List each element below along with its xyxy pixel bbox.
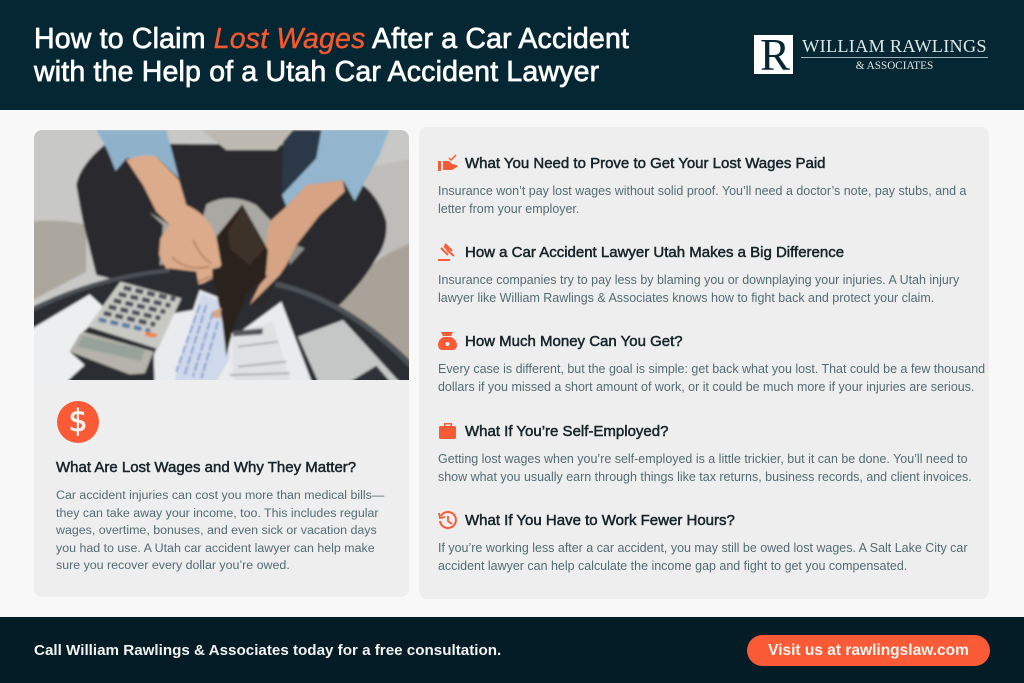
header band bbox=[0, 0, 1024, 110]
body bbox=[438, 452, 972, 484]
logo name: WILLIAM RAWLINGS bbox=[802, 36, 987, 56]
body: dollars if you missed a short amount of work, or it could be much more if your injuries are serious. bbox=[438, 380, 974, 394]
body: letter from your employer. bbox=[438, 202, 579, 216]
button: Visit us at rawlingslaw.com bbox=[768, 642, 969, 659]
heading: How a Car Accident Lawyer Utah Makes a Big Difference bbox=[465, 244, 844, 261]
laptop bbox=[298, 320, 402, 385]
left body text: wages, overtime, bonuses, and even sick or vacation days bbox=[56, 523, 377, 537]
section: fewer hours bbox=[438, 511, 968, 573]
shirt bbox=[282, 130, 323, 195]
section: proof bbox=[438, 154, 966, 216]
heading: What You Need to Prove to Get Your Lost Wages Paid bbox=[465, 155, 826, 172]
body: Insurance companies try to pay less by blaming you or downplaying your injuries. A Utah injury bbox=[438, 273, 959, 287]
body: Insurance won’t pay lost wages without solid proof. You’ll need a doctor’s note, pay stubs, and a bbox=[438, 184, 966, 198]
section: lawyer difference bbox=[438, 243, 960, 305]
papers bbox=[30, 294, 103, 385]
right panel bbox=[419, 127, 989, 599]
left panel bbox=[34, 130, 409, 597]
title bbox=[34, 23, 630, 88]
footer call to action text: Call William Rawlings & Associates today for a free consultation. bbox=[34, 642, 501, 659]
wallet bbox=[213, 204, 268, 357]
left arm and hand bbox=[126, 156, 222, 288]
left body text: they can take away your income, too. This includes regular bbox=[56, 506, 379, 520]
table bbox=[30, 268, 415, 385]
icon: briefcase bbox=[439, 423, 456, 439]
left body text: you had to use. A Utah car accident lawyer can help make bbox=[56, 541, 375, 555]
heading: What If You Have to Work Fewer Hours? bbox=[465, 512, 735, 529]
photo: man holding empty wallet over bills bbox=[34, 130, 409, 380]
icon: money bag bbox=[438, 332, 457, 350]
icon: gavel bbox=[438, 243, 455, 261]
calculator bbox=[88, 282, 181, 349]
body bbox=[438, 362, 985, 394]
icon: clock history bbox=[438, 511, 457, 529]
title: with the Help of a Utah Car Accident Lawyer bbox=[34, 56, 599, 88]
body bbox=[438, 184, 966, 216]
body: accident lawyer can help calculate the income gap and fight to get you compensated. bbox=[438, 559, 907, 573]
body bbox=[438, 273, 960, 305]
pants bbox=[76, 143, 387, 312]
body: lawyer like William Rawlings & Associates knows how to fight back and protect your claim. bbox=[438, 291, 934, 305]
icon: hand with check bbox=[438, 154, 457, 171]
left body text bbox=[56, 488, 384, 572]
right arm and hand bbox=[250, 180, 345, 305]
body bbox=[438, 541, 968, 573]
heading: How Much Money Can You Get? bbox=[465, 333, 683, 350]
icon: dollar coin bbox=[57, 401, 99, 443]
body: show what you usually earn through things like tax returns, business records, and client invoices. bbox=[438, 470, 972, 484]
logo bbox=[754, 35, 988, 74]
button bbox=[747, 635, 990, 666]
title: How to Claim Lost Wages After a Car Accident bbox=[34, 23, 629, 55]
section: how much bbox=[438, 332, 985, 394]
section: self-employed bbox=[438, 423, 972, 484]
left heading: What Are Lost Wages and Why They Matter? bbox=[56, 459, 356, 476]
body: Getting lost wages when you’re self-employed is a little trickier, but it can be done. You’ll need to bbox=[438, 452, 968, 466]
body: If you’re working less after a car accident, you may still be owed lost wages. A Salt Lake City car bbox=[438, 541, 967, 555]
footer band bbox=[0, 617, 1024, 683]
body: Every case is different, but the goal is simple: get back what you lost. That could be a few thousand bbox=[438, 362, 985, 376]
icon: dollar coin: $ bbox=[68, 404, 88, 439]
logo subtitle: & ASSOCIATES bbox=[856, 60, 933, 72]
left body text: sure you recover every dollar you’re owed. bbox=[56, 558, 290, 572]
heading: What If You’re Self-Employed? bbox=[465, 423, 668, 440]
left body text: Car accident injuries can cost you more than medical bills— bbox=[56, 488, 384, 502]
